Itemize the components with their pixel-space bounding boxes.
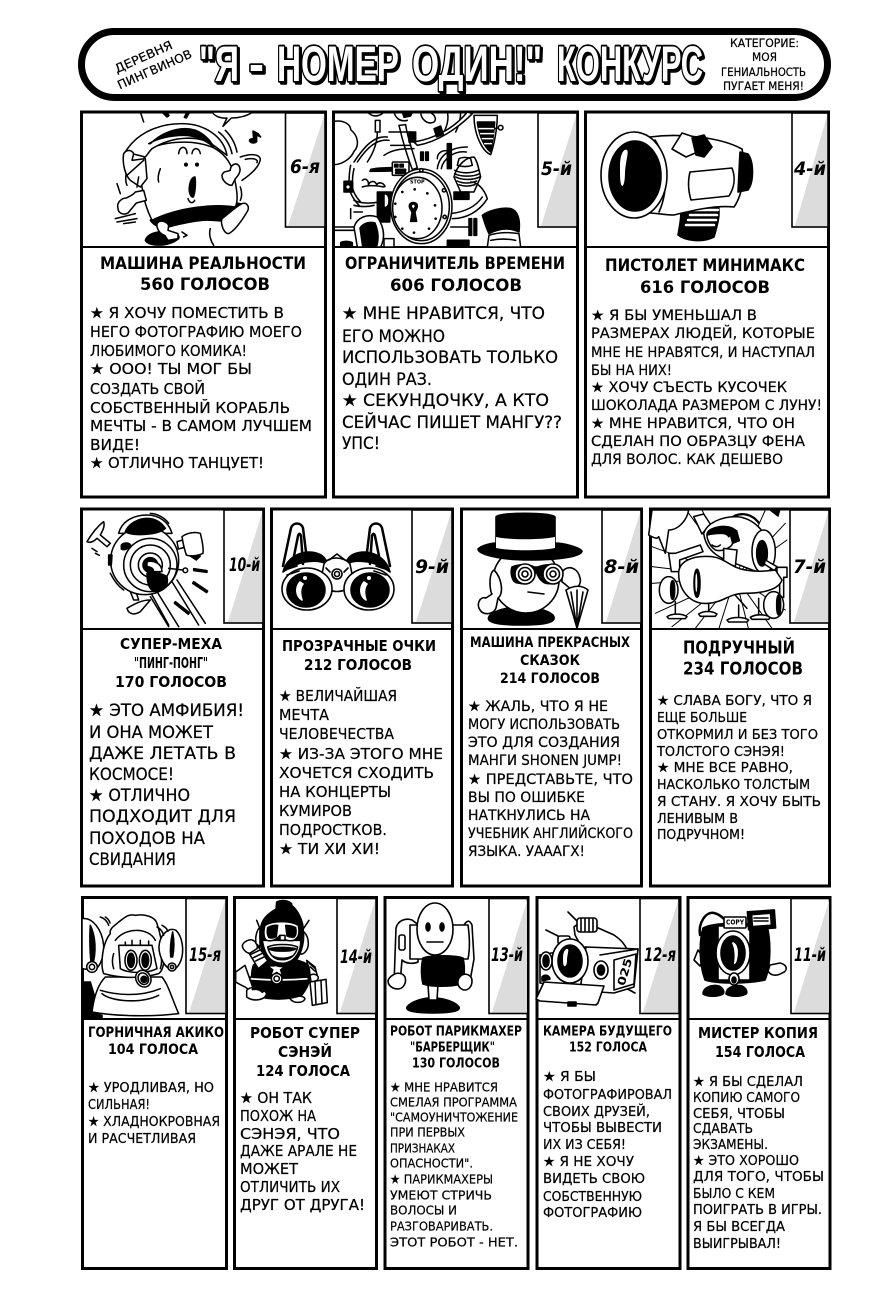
banner right label: category: ПУГАЕТ МЕНЯ! — [723, 79, 804, 93]
banner title: ОДИН!" — [412, 36, 542, 92]
rank box — [791, 898, 830, 1014]
panel: 6th place reality machine — [81, 112, 326, 497]
title: ПОДРУЧНЫЙ — [683, 636, 795, 658]
comments text: ФОТОГРАФИЮ — [543, 1205, 642, 1221]
comments text: СВОИХ ДРУЗЕЙ, — [543, 1102, 650, 1120]
comments text: ОПАСНОСТИ". — [390, 1156, 473, 1170]
title: КАМЕРА БУДУЩЕГО — [543, 1024, 672, 1040]
comments text: ОТКОРМИЛ И БЕЗ ТОГО — [657, 727, 818, 743]
comments text: ДАЖЕ ЛЕТАТЬ В — [89, 744, 236, 764]
comments text: КОСМОСЕ! — [89, 765, 174, 785]
title: 152 ГОЛОСА — [569, 1040, 647, 1056]
comments text: ★ ТИ ХИ ХИ! — [279, 840, 380, 858]
panel: 8th place wonderful tale machine — [461, 509, 642, 886]
title: 170 ГОЛОСОВ — [115, 673, 227, 691]
title: 214 ГОЛОСОВ — [500, 671, 600, 687]
panel: 5th place time limiter — [333, 112, 578, 497]
comments text: ОТЛИЧИТЬ ИХ — [240, 1178, 340, 1196]
comments text: ★ ВЕЛИЧАЙШАЯ — [279, 686, 397, 705]
comments text: ★ МНЕ НРАВИТСЯ, ЧТО — [342, 304, 545, 324]
banner title — [199, 36, 703, 92]
title: МАШИНА РЕАЛЬНОСТИ — [100, 254, 306, 274]
comments text: ★ ПРЕДСТАВЬТЕ, ЧТО — [468, 772, 633, 788]
comments text: СЕБЯ, ЧТОБЫ — [693, 1106, 785, 1122]
title: "БАРБЕРЩИК" — [410, 1040, 495, 1056]
title: 234 ГОЛОСОВ — [683, 658, 803, 680]
panel: 7th place assistant — [649, 509, 830, 886]
comments text: БЫ НА НИХ! — [591, 363, 672, 379]
title: ОГРАНИЧИТЕЛЬ ВРЕМЕНИ — [345, 254, 565, 274]
title: "ПИНГ-ПОНГ" — [134, 654, 208, 672]
title — [345, 254, 565, 296]
illustration: headphone character — [115, 112, 261, 245]
rank box: 6-я — [290, 156, 320, 178]
banner left label: penguin village: ПИНГВИНОВ — [115, 47, 194, 92]
comments text: Я БЫ ВСЕГДА — [693, 1219, 786, 1235]
rank box: 13-й — [491, 944, 523, 966]
comments text: ★ ОТЛИЧНО ТАНЦУЕТ! — [90, 454, 264, 472]
title — [115, 635, 227, 691]
illustration: camera man mister copy: COPY — [726, 918, 745, 926]
rank box — [489, 898, 528, 1014]
comments text: КУМИРОВ — [279, 802, 352, 820]
title: 606 ГОЛОСОВ — [390, 276, 522, 296]
comments text: ВОЛОСЫ И — [390, 1202, 457, 1218]
illustration: round flying mecha — [87, 513, 208, 627]
comments text: И РАСЧЕТЛИВАЯ — [88, 1131, 196, 1147]
rank box: 15-я — [189, 944, 221, 966]
title: 104 ГОЛОСА — [108, 1042, 198, 1058]
comments text: УПС! — [342, 434, 380, 454]
rank box — [224, 510, 263, 623]
title: 560 ГОЛОСОВ — [140, 275, 270, 295]
comments text: ★ СЕКУНДОЧКУ, А КТО — [342, 391, 549, 411]
rank box: 4-й — [793, 158, 826, 180]
rank box — [286, 113, 325, 227]
panel: 15th place maid akiko — [82, 898, 227, 1268]
comments text: ДРУГ ОТ ДРУГА! — [240, 1196, 365, 1214]
comments text — [90, 304, 312, 472]
title: 212 ГОЛОСОВ — [304, 656, 412, 674]
comments text: ШОКОЛАДА РАЗМЕРОМ С ЛУНУ! — [591, 398, 822, 414]
title: РОБОТ СУПЕР — [250, 1024, 360, 1042]
comments text: И ОНА МОЖЕТ — [89, 723, 214, 743]
comments text: ПОХОДОВ НА — [89, 829, 205, 849]
comments text: ПРИ ПЕРВЫХ — [390, 1124, 465, 1140]
panel: 9th place transparent glasses — [271, 509, 453, 886]
illustration: clock machine: STOP — [410, 179, 425, 185]
comments text: СЕЙЧАС ПИШЕТ МАНГУ?? — [342, 411, 562, 433]
comments text: БЫЛО С КЕМ — [693, 1186, 775, 1202]
illustration: robot super senbei — [236, 900, 327, 1005]
title — [683, 636, 803, 680]
title: РОБОТ ПАРИКМАХЕР — [390, 1024, 522, 1040]
title: СУПЕР-МЕХА — [120, 635, 222, 653]
comments text: ПОХОЖ НА — [240, 1107, 317, 1125]
comments text — [468, 699, 633, 860]
title: МИСТЕР КОПИЯ — [698, 1024, 818, 1042]
title: МАШИНА ПРЕКРАСНЫХ — [470, 635, 630, 651]
comments text: Я СТАНУ. Я ХОЧУ БЫТЬ — [657, 794, 821, 810]
comments text: НА КОНЦЕРТЫ — [279, 783, 391, 801]
comments text: ЛЕНИВЫМ В — [657, 811, 738, 827]
comments text: ★ Я БЫ УМЕНЬШАЛ В — [591, 308, 757, 324]
comments text: СВИДАНИЯ — [89, 850, 176, 870]
comments text: СИЛЬНАЯ! — [88, 1097, 150, 1113]
comments text: ★ Я БЫ СДЕЛАЛ — [693, 1074, 803, 1090]
comments text: ★ МНЕ ВСЕ РАВНО, — [657, 760, 793, 776]
banner left label: penguin village: ДЕРЕВНЯ — [112, 38, 175, 76]
illustration: maid robot akiko — [82, 915, 183, 1019]
comments text: СМЕЛАЯ ПРОГРАММА — [390, 1094, 517, 1110]
comments text: ★ Я НЕ ХОЧУ — [543, 1154, 634, 1170]
comments text: ОДИН РАЗ. — [342, 370, 432, 390]
title: 124 ГОЛОСА — [256, 1062, 350, 1080]
comments text — [88, 1080, 220, 1147]
comments text: ЧТОБЫ ВЫВЕСТИ — [543, 1120, 662, 1136]
comments text: МНЕ НЕ НРАВЯТСЯ, И НАСТУПАЛ — [591, 345, 815, 361]
comments text: ★ МНЕ НРАВИТСЯ — [390, 1080, 498, 1094]
comments text: ★ ХОЧУ СЪЕСТЬ КУСОЧЕК — [591, 380, 787, 396]
title: СКАЗОК — [520, 653, 581, 669]
comments text: ПОДХОДИТ ДЛЯ — [89, 807, 236, 827]
comments text: СДЕЛАН ПО ОБРАЗЦУ ФЕНА — [591, 434, 805, 450]
title — [698, 1024, 818, 1061]
comments text: ДЛЯ ВОЛОС. КАК ДЕШЕВО — [591, 452, 783, 468]
comments text: ДАЖЕ АРАЛЕ НЕ — [240, 1142, 357, 1160]
comments text: СОБСТВЕННУЮ — [543, 1189, 642, 1205]
panel: 4th place minimax pistol — [585, 112, 829, 497]
title: ПРОЗРАЧНЫЕ ОЧКИ — [282, 637, 436, 655]
rank box: 5-й — [541, 158, 572, 180]
comments text: СОБСТВЕННЫЙ КОРАБЛЬ — [90, 398, 290, 417]
comments text: ХОЧЕТСЯ СХОДИТЬ — [279, 764, 434, 782]
comments text: ★ УРОДЛИВАЯ, НО — [88, 1080, 214, 1096]
title — [390, 1024, 522, 1072]
banner title: КОНКУРС — [557, 36, 703, 92]
banner right label: category: МОЯ — [752, 50, 777, 64]
rank box — [337, 898, 376, 1014]
comments text: ЭТО ДЛЯ СОЗДАНИЯ — [468, 735, 620, 751]
comments text — [240, 1089, 365, 1214]
comments text: МЕЧТА — [279, 706, 330, 724]
comments text: ЕЩЕ БОЛЬШЕ — [657, 710, 747, 726]
comments text: МОЖЕТ — [240, 1160, 299, 1178]
comments text: ИХ ИЗ СЕБЯ! — [543, 1137, 626, 1153]
banner title: - — [249, 36, 264, 92]
comments text: ФОТОГРАФИРОВАЛ — [543, 1087, 672, 1103]
comments text: ЯЗЫКА. УАААГХ! — [468, 844, 585, 860]
comments text — [543, 1069, 672, 1221]
title — [282, 637, 436, 674]
comments text: ЭКЗАМЕНЫ. — [693, 1137, 768, 1153]
comments text: ★ ООО! ТЫ МОГ БЫ — [90, 360, 252, 378]
title: СЭНЭЙ — [278, 1042, 332, 1061]
comments text: ★ Я ХОЧУ ПОМЕСТИТЬ В — [90, 304, 284, 322]
panel: 14th place robot super senbei — [234, 898, 377, 1268]
rank box: 10-й — [229, 554, 260, 576]
banner — [82, 32, 828, 98]
illustration: camera man mister copy — [694, 910, 786, 996]
comments text: ★ СЛАВА БОГУ, ЧТО Я — [657, 693, 812, 709]
panel: 12th place camera of the future — [536, 898, 681, 1268]
comments text: РАЗГОВАРИВАТЬ. — [390, 1218, 493, 1234]
comments text: ★ ЭТО АМФИБИЯ! — [89, 701, 244, 721]
banner right label: category: ГЕНИАЛЬНОСТЬ — [721, 65, 806, 79]
title — [88, 1025, 224, 1058]
illustration: clock machine — [334, 112, 521, 247]
rank box — [790, 510, 829, 623]
comments text — [279, 686, 443, 858]
illustration: future camera — [536, 912, 638, 1006]
illustration: minimax pistol — [601, 132, 752, 241]
comments text: ★ МНЕ НРАВИТСЯ, ЧТО ОН — [591, 416, 795, 432]
comments text: МОГУ ИСПОЛЬЗОВАТЬ — [468, 717, 620, 733]
comments text: ★ ОН ТАК — [240, 1089, 312, 1107]
rank box — [538, 113, 577, 227]
title: 130 ГОЛОСОВ — [412, 1056, 500, 1072]
title — [250, 1024, 360, 1080]
rank box — [792, 113, 828, 227]
comments text: ВИДЕ! — [90, 436, 140, 454]
comments text: ИСПОЛЬЗОВАТЬ ТОЛЬКО — [342, 348, 558, 368]
comments text: УЧЕБНИК АНГЛИЙСКОГО — [468, 824, 633, 842]
title — [470, 635, 630, 687]
comments text: ЧЕЛОВЕЧЕСТВА — [279, 725, 395, 743]
rank box: 7-й — [793, 556, 826, 578]
comments text: ЛЮБИМОГО КОМИКА! — [90, 342, 247, 360]
comments text: ★ ХЛАДНОКРОВНАЯ — [88, 1114, 220, 1130]
comments text: МАНГИ SHONEN JUMP! — [468, 753, 622, 769]
panel: 10th place super mecha ping-pong — [81, 509, 264, 886]
comments text: ПОИГРАТЬ В ИГРЫ. — [693, 1202, 822, 1218]
comments text: ТОЛСТОГО СЭНЭЯ! — [656, 744, 785, 760]
comments text: СЭНЭЯ, ЧТО — [240, 1125, 340, 1143]
comments text — [390, 1080, 518, 1250]
rank box: 14-й — [340, 946, 372, 968]
comments text: ПРИЗНАКАХ — [390, 1140, 455, 1156]
comments text: ★ ЖАЛЬ, ЧТО Я НЕ — [468, 699, 608, 715]
comments text: РАЗМЕРАХ ЛЮДЕЙ, КОТОРЫЕ — [591, 324, 815, 342]
comments text: ВИДЕТЬ СВОЮ — [543, 1171, 645, 1187]
title: 616 ГОЛОСОВ — [640, 278, 770, 298]
comments text — [693, 1074, 824, 1252]
rank box: 8-й — [604, 556, 639, 578]
comments text: ВЫ ПО ОШИБКЕ — [468, 790, 585, 806]
comments text: УМЕЮТ СТРИЧЬ — [390, 1188, 492, 1202]
comments text — [89, 701, 244, 870]
title — [605, 256, 805, 298]
comments text: ★ ЭТО ХОРОШО — [693, 1153, 799, 1169]
comments text — [591, 308, 822, 468]
title — [543, 1024, 672, 1056]
comments text: ★ ПАРИКМАХЕРЫ — [390, 1172, 493, 1186]
comments text: НЕГО ФОТОГРАФИЮ МОЕГО — [90, 323, 302, 341]
rank box: 12-я — [644, 944, 676, 966]
comments text: ★ ОТЛИЧНО — [89, 786, 190, 806]
comments text: СОЗДАТЬ СВОЙ — [90, 379, 205, 398]
rank box — [640, 898, 679, 1014]
rank box — [186, 898, 226, 1014]
banner left label: penguin village — [109, 32, 194, 92]
panel: 13th place robot barber — [385, 898, 529, 1268]
title: 154 ГОЛОСА — [715, 1043, 805, 1061]
rank box: 9-й — [415, 556, 449, 578]
rank box — [602, 510, 641, 623]
banner title: НОМЕР — [277, 36, 399, 92]
comments text: "САМОУНИЧТОЖЕНИЕ — [390, 1110, 518, 1124]
comments text: СДАВАТЬ — [693, 1121, 753, 1137]
title: ГОРНИЧНАЯ АКИКО — [88, 1025, 224, 1041]
title — [100, 254, 306, 295]
comments text: НАСКОЛЬКО ТОЛСТЫМ — [657, 777, 810, 793]
comments text: КОПИЮ САМОГО — [693, 1090, 800, 1106]
title: ПИСТОЛЕТ МИНИМАКС — [605, 256, 805, 276]
comments text: ВЫИГРЫВАЛ! — [693, 1236, 781, 1252]
banner right label: category — [721, 36, 806, 93]
illustration: top hat robot with umbrella — [478, 513, 588, 628]
illustration: boy riding robot — [649, 510, 787, 629]
comments text: МЕЧТЫ - В САМОМ ЛУЧШЕМ — [90, 417, 312, 435]
comments text: НАТКНУЛИСЬ НА — [468, 808, 590, 824]
comments text: ПОДРУЧНОМ! — [657, 827, 745, 843]
illustration: future camera: 025 — [615, 957, 635, 987]
comments text — [342, 304, 562, 454]
panel: 11th place mister copy — [688, 898, 831, 1268]
comments text — [656, 693, 821, 843]
comments text: ДЛЯ ТОГО, ЧТОБЫ — [693, 1169, 824, 1185]
rank box — [412, 510, 452, 623]
comments text: ЭТОТ РОБОТ - НЕТ. — [390, 1234, 518, 1250]
illustration: robot barber — [388, 903, 474, 1013]
comments text: ★ Я БЫ — [543, 1069, 596, 1085]
comments text: ★ ИЗ-ЗА ЭТОГО МНЕ — [279, 745, 443, 763]
banner title: "Я — [199, 36, 239, 92]
comments text: ПОДРОСТКОВ. — [279, 821, 387, 839]
rank box: 11-й — [794, 944, 826, 966]
illustration: transparent glasses — [282, 524, 394, 610]
banner right label: category: КАТЕГОРИЕ: — [730, 36, 799, 50]
comments text: ЕГО МОЖНО — [342, 327, 445, 347]
